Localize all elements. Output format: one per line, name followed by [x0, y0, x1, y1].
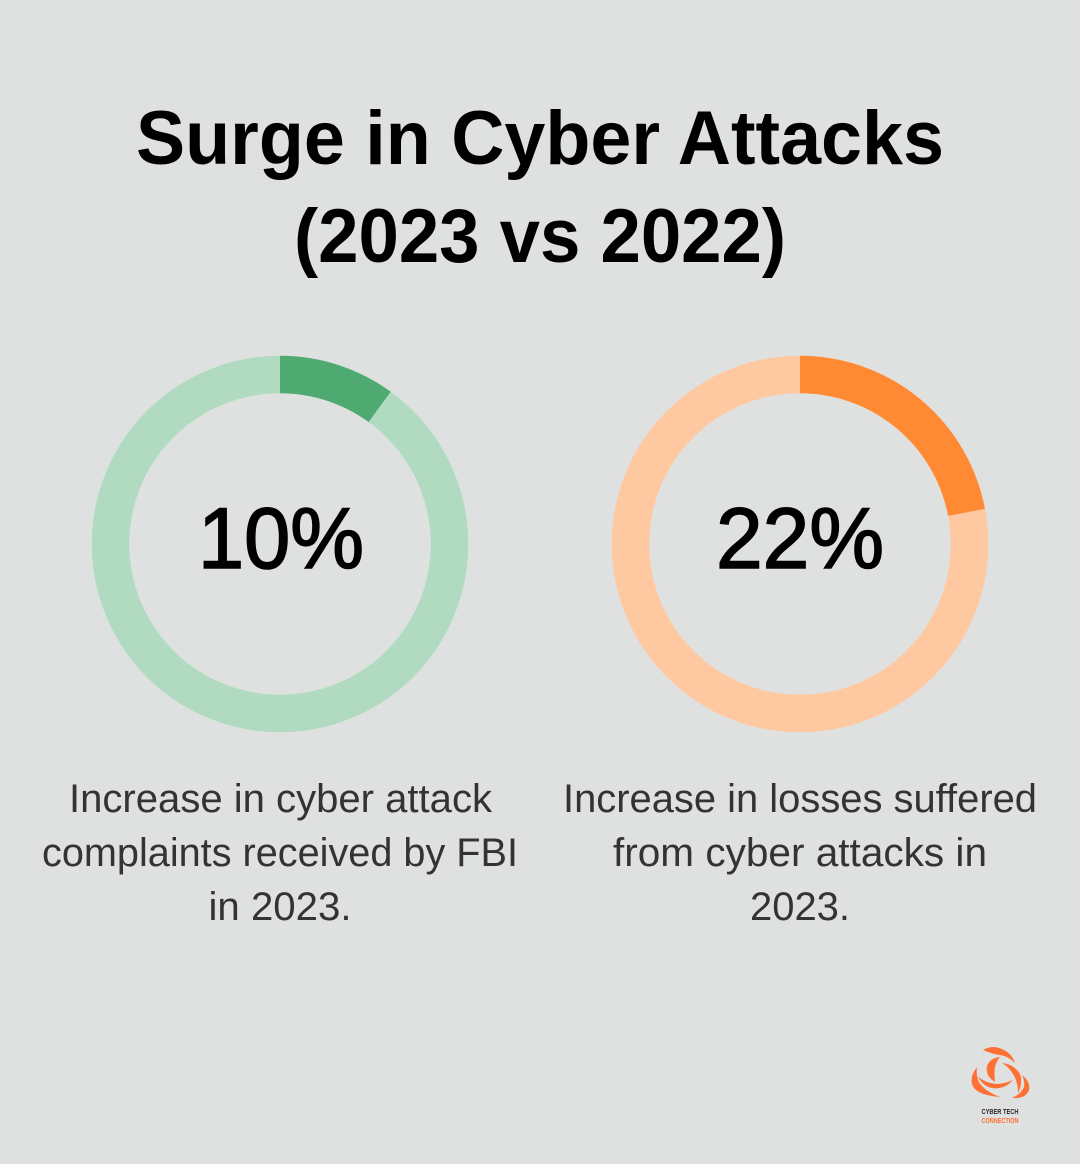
title: Surge in Cyber Attacks: [136, 96, 944, 181]
donut chart: 10%: [110, 374, 450, 714]
title: (2023 vs 2022): [294, 194, 786, 279]
title: [136, 96, 944, 279]
logo: Cyber Tech Connection: [972, 1047, 1029, 1125]
description: complaints: complaints received by FBI: [42, 831, 518, 875]
description: losses: from cyber attacks in: [613, 831, 987, 875]
description: losses: Increase in losses suffered: [563, 777, 1037, 821]
value: 10%: 10%: [198, 491, 364, 587]
panel: losses statistic: [563, 374, 1037, 929]
logo wordmark: Connection: CONNECTION: [982, 1116, 1018, 1125]
icon: three swirling blades: [972, 1047, 1029, 1098]
value: 22%: 22%: [716, 491, 884, 587]
panel: complaints statistic: [42, 374, 518, 929]
donut chart: 22%: [630, 374, 970, 714]
description: complaints: Increase in cyber attack: [69, 777, 493, 821]
description: complaints: in 2023.: [208, 885, 352, 929]
description: losses: [563, 777, 1037, 929]
description: losses: 2023.: [750, 885, 850, 929]
logo wordmark: Cyber Tech: CYBER TECH: [982, 1107, 1018, 1116]
description: complaints: [42, 777, 518, 929]
